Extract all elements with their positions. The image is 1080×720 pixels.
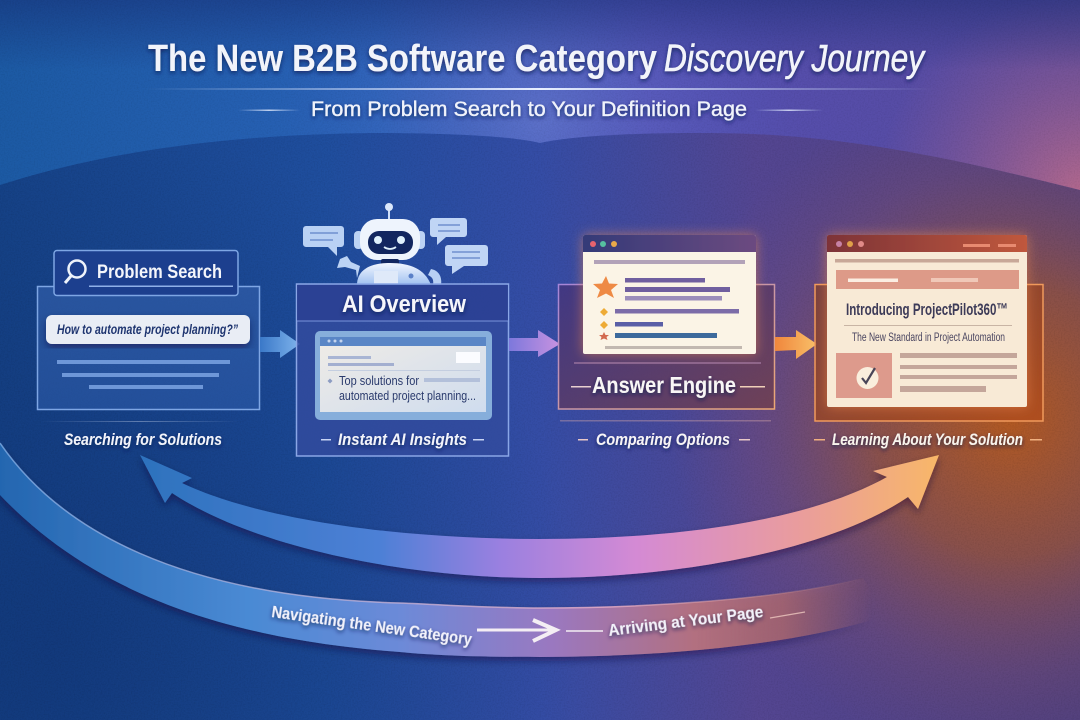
subtitle: From Problem Search to Your Definition Page xyxy=(311,98,747,121)
caption: searching for solutions: Searching for Solutions xyxy=(64,430,222,449)
title divider xyxy=(145,88,935,90)
header band xyxy=(0,0,1080,200)
panel: your definition page xyxy=(815,235,1043,421)
panel: problem search xyxy=(38,250,260,410)
caption: learning about your solution: Learning About Your Solution xyxy=(832,430,1023,449)
label: navigating the new category: Navigating the New Category xyxy=(270,602,474,649)
lower curved band: navigating to arriving xyxy=(0,443,887,657)
arrow: search to overview xyxy=(260,330,300,358)
caption: instant ai insights: Instant AI Insights xyxy=(338,430,467,449)
ai answer card: automated project planning... xyxy=(339,389,476,403)
icon: robot xyxy=(303,203,488,285)
speech bubble top right xyxy=(430,218,467,245)
label: arriving at your page: Arriving at Your Page xyxy=(607,602,764,640)
product page window xyxy=(827,235,1027,407)
ai answer card xyxy=(315,331,492,420)
result lines xyxy=(57,360,230,389)
answer engine window xyxy=(583,235,756,354)
icon: magnifying glass xyxy=(65,260,86,283)
product page window: The New Standard in Project Automation xyxy=(852,332,1005,344)
speech bubble lower right xyxy=(445,245,488,274)
search header xyxy=(54,250,238,296)
robot figure xyxy=(337,203,441,285)
speech bubble left xyxy=(303,226,344,256)
upper curved double arrow xyxy=(140,455,939,578)
arrow: overview to answer engine xyxy=(509,330,560,357)
ai answer card: Top solutions for xyxy=(339,374,419,388)
title: Discovery Journey xyxy=(664,38,926,80)
caption: comparing options: Comparing Options xyxy=(596,430,730,449)
heading: answer engine: Answer Engine xyxy=(592,372,736,398)
panel: answer engine xyxy=(558,235,774,409)
query pill xyxy=(46,315,250,344)
search header: Problem Search xyxy=(97,262,222,283)
query pill: How to automate project planning?” xyxy=(57,321,238,337)
arrow: answer engine to your page xyxy=(775,330,817,359)
product page window: Introducing ProjectPilot360™ xyxy=(846,300,1008,319)
heading: ai overview: AI Overview xyxy=(342,291,466,318)
arrow: journey direction xyxy=(477,620,603,641)
icon: star xyxy=(593,276,618,298)
panel: ai overview xyxy=(296,284,508,456)
title: The New B2B Software Category xyxy=(148,38,657,80)
